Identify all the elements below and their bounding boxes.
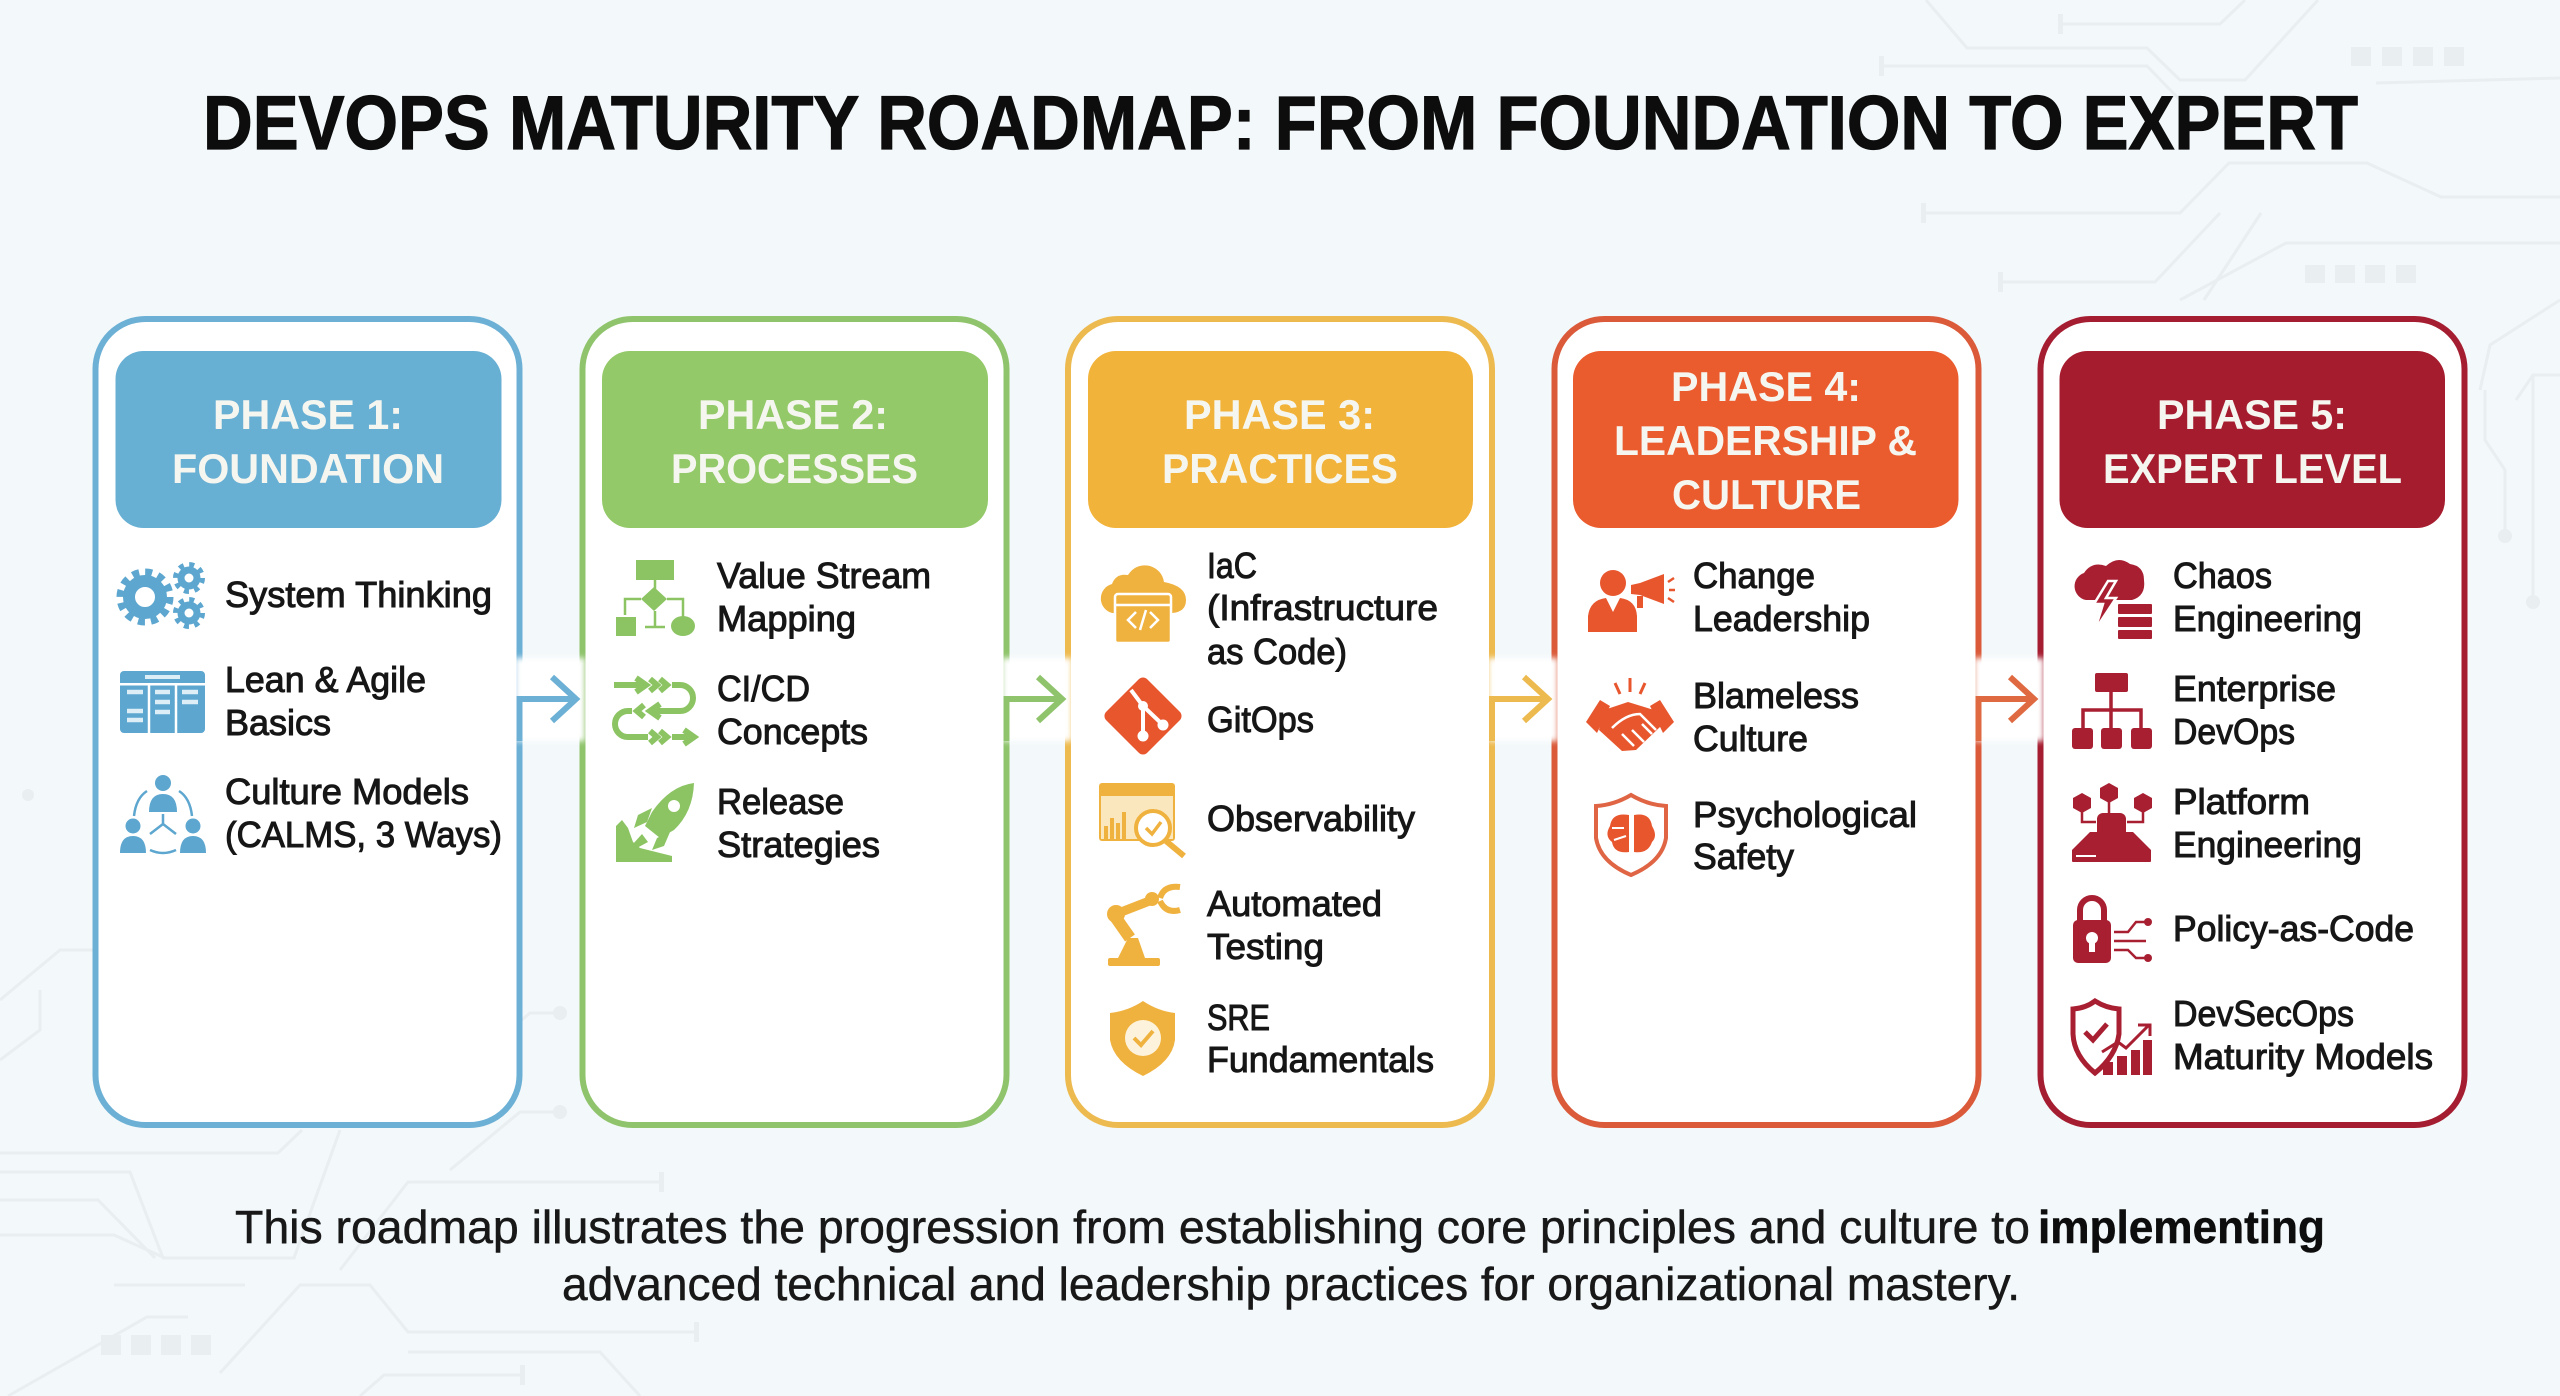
footer summary text: implementing bbox=[2038, 1201, 2325, 1253]
item: GitOps bbox=[1102, 675, 1314, 757]
label: IaC bbox=[1207, 545, 1257, 586]
label bbox=[2173, 993, 2433, 1077]
label: Leadership bbox=[1693, 598, 1870, 639]
heading: phase 1 bbox=[116, 351, 502, 528]
item: GitOps: GitOps bbox=[1207, 699, 1314, 740]
label: Automated bbox=[1207, 883, 1382, 924]
label: Release bbox=[717, 781, 844, 822]
label: as Code) bbox=[1207, 631, 1347, 672]
item: Chaos Engineering bbox=[2075, 555, 2362, 639]
label: Fundamentals bbox=[1207, 1039, 1434, 1080]
label: DevSecOps bbox=[2173, 993, 2354, 1034]
label: (CALMS, 3 Ways) bbox=[225, 814, 502, 855]
panel: phase 5 expert level bbox=[2040, 319, 2464, 1125]
footer summary text: This roadmap illustrates the progression from establishing core principles and culture to bbox=[235, 1201, 2030, 1253]
panel: phase 3 practices bbox=[1068, 319, 1492, 1125]
item: IaC bbox=[1101, 545, 1438, 672]
label: Change bbox=[1693, 555, 1815, 596]
panel: phase 1 foundation bbox=[96, 319, 520, 1125]
icon: handshake bbox=[1586, 678, 1674, 751]
panel: phase 2 processes bbox=[582, 319, 1006, 1125]
footer summary text bbox=[235, 1201, 2325, 1310]
item: Observability bbox=[1099, 783, 1415, 856]
title: DEVOPS MATURITY ROADMAP: FROM FOUNDATION TO EXPERT bbox=[203, 81, 2358, 166]
heading: phase 5: EXPERT LEVEL bbox=[2103, 445, 2402, 492]
background circuit pattern top right bbox=[1879, 0, 2560, 609]
background circuit pattern bottom left bbox=[0, 789, 699, 1396]
item: DevSecOps Maturity Models bbox=[2073, 993, 2433, 1077]
item: Policy-as-Code: Policy-as-Code bbox=[2173, 908, 2414, 949]
heading: phase 4: LEADERSHIP & bbox=[1614, 417, 1917, 464]
label: Testing bbox=[1207, 926, 1324, 967]
item: System Thinking: System Thinking bbox=[225, 574, 492, 615]
label: Strategies bbox=[717, 824, 880, 865]
icon: pipeline arrows bbox=[614, 678, 694, 744]
heading: phase 3 bbox=[1088, 351, 1473, 528]
item: Observability: Observability bbox=[1207, 798, 1415, 839]
label: Lean & Agile bbox=[225, 659, 426, 700]
label: Safety bbox=[1693, 836, 1794, 877]
label: Basics bbox=[225, 702, 331, 743]
heading: phase 5 bbox=[2060, 351, 2445, 528]
footer summary text: advanced technical and leadership practices for organizational mastery. bbox=[562, 1258, 2020, 1310]
icon: gears bbox=[120, 564, 202, 626]
item: SRE Fundamentals bbox=[1110, 997, 1434, 1080]
label: Mapping bbox=[717, 598, 856, 639]
icon: dashboard magnifier bbox=[1099, 783, 1184, 856]
item: Culture Models bbox=[120, 771, 502, 855]
label: Maturity Models bbox=[2173, 1036, 2433, 1077]
label: CI/CD bbox=[717, 668, 810, 709]
heading: phase 3: PHASE 3: bbox=[1184, 391, 1375, 438]
item: Value Stream Mapping bbox=[616, 555, 931, 639]
arrow: phase 4 to phase 5 bbox=[1978, 677, 2034, 741]
label bbox=[1693, 675, 1859, 759]
label: (Infrastructure bbox=[1207, 587, 1438, 628]
heading: phase 2: PROCESSES bbox=[671, 445, 918, 492]
label: Culture Models bbox=[225, 771, 469, 812]
label bbox=[2173, 668, 2336, 752]
item: Platform Engineering bbox=[2072, 781, 2362, 865]
icon: flowchart bbox=[616, 560, 695, 636]
label: Concepts bbox=[717, 711, 868, 752]
icon: storm cloud and server bbox=[2075, 560, 2152, 639]
icon: lock with code bbox=[2073, 898, 2152, 963]
label bbox=[225, 771, 502, 855]
label: Engineering bbox=[2173, 824, 2362, 865]
label bbox=[2173, 555, 2362, 639]
icon: platform with cubes bbox=[2072, 783, 2152, 862]
icon: person with megaphone bbox=[1588, 570, 1675, 632]
item: Release Strategies bbox=[616, 781, 880, 865]
label: Culture bbox=[1693, 718, 1808, 759]
arrow: phase 1 to phase 2 bbox=[520, 677, 576, 741]
arrow: phase 3 to phase 4 bbox=[1492, 677, 1548, 741]
item: Psychological Safety bbox=[1596, 794, 1917, 877]
heading: phase 4: PHASE 4: bbox=[1671, 363, 1861, 410]
heading: phase 3: PRACTICES bbox=[1162, 445, 1398, 492]
icon: rocket bbox=[616, 783, 694, 862]
icon: shield with brain bbox=[1596, 795, 1666, 875]
label bbox=[1693, 555, 1870, 639]
label bbox=[2173, 781, 2362, 865]
heading: phase 1: PHASE 1: bbox=[213, 391, 403, 438]
label: Value Stream bbox=[717, 555, 931, 596]
label: DevOps bbox=[2173, 711, 2295, 752]
icon: git diamond bbox=[1102, 675, 1184, 757]
icon: cloud with code bbox=[1101, 565, 1186, 643]
heading: phase 2: PHASE 2: bbox=[698, 391, 888, 438]
item: Lean & Agile Basics bbox=[120, 659, 426, 743]
item: Policy-as-Code bbox=[2073, 898, 2414, 963]
item: System Thinking bbox=[120, 564, 492, 626]
label: SRE bbox=[1207, 997, 1270, 1038]
label: Chaos bbox=[2173, 555, 2272, 596]
heading: phase 4 bbox=[1573, 351, 1958, 528]
label bbox=[717, 781, 880, 865]
panel: phase 4 leadership and culture bbox=[1554, 319, 1978, 1125]
heading: phase 4: CULTURE bbox=[1672, 471, 1861, 518]
label: Engineering bbox=[2173, 598, 2362, 639]
label: Blameless bbox=[1693, 675, 1859, 716]
label bbox=[717, 668, 868, 752]
label bbox=[1207, 997, 1434, 1080]
label: Platform bbox=[2173, 781, 2310, 822]
label bbox=[1207, 545, 1438, 672]
heading: phase 1: FOUNDATION bbox=[172, 445, 444, 492]
heading: phase 5: PHASE 5: bbox=[2157, 391, 2347, 438]
icon: shield and growth chart bbox=[2073, 1001, 2152, 1075]
item: Change Leadership bbox=[1588, 555, 1870, 639]
item: Automated Testing bbox=[1107, 883, 1382, 967]
icon: org chart bbox=[2072, 673, 2152, 749]
icon: robot arm bbox=[1107, 887, 1180, 966]
item: Enterprise DevOps bbox=[2072, 668, 2336, 752]
label bbox=[1207, 883, 1382, 967]
heading: phase 2 bbox=[602, 351, 988, 528]
label bbox=[225, 659, 426, 743]
label bbox=[717, 555, 931, 639]
icon: kanban board bbox=[120, 671, 205, 733]
arrow: phase 2 to phase 3 bbox=[1006, 677, 1062, 741]
icon: shield check bbox=[1110, 1001, 1175, 1076]
item: CI/CD Concepts bbox=[614, 668, 868, 752]
label: Psychological bbox=[1693, 794, 1917, 835]
label bbox=[1693, 794, 1917, 877]
label: Enterprise bbox=[2173, 668, 2336, 709]
icon: three people cycle bbox=[120, 775, 206, 853]
item: Blameless Culture bbox=[1586, 675, 1859, 759]
